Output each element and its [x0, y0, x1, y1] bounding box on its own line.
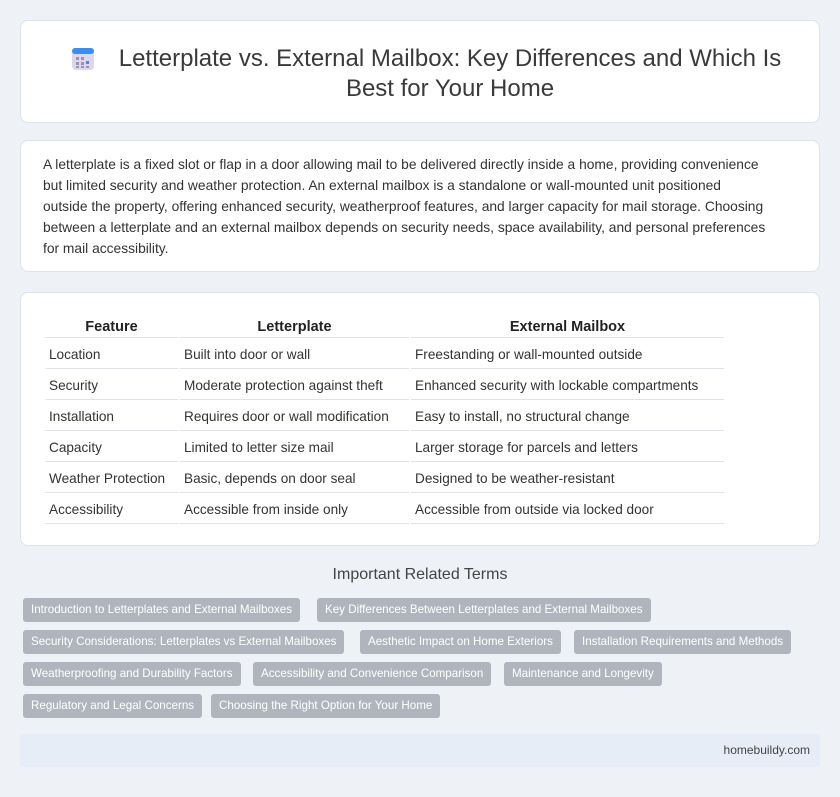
related term tags: Choosing the Right Option for Your Home [219, 699, 432, 712]
related term tags: Installation Requirements and Methods [582, 635, 783, 648]
comparison table card: Accessible from outside via locked door [415, 502, 654, 516]
comparison table card: Accessible from inside only [184, 502, 348, 516]
comparison table card: Easy to install, no structural change [415, 408, 630, 424]
comparison table card: Freestanding or wall-mounted outside [415, 346, 642, 362]
comparison table card: Enhanced security with lockable compartments [415, 378, 698, 392]
intro text card: but limited security and weather protection. An external mailbox is a standalone or wall-mounted unit positioned [43, 178, 721, 193]
related term tags: Key Differences Between Letterplates and External Mailboxes [325, 603, 643, 616]
comparison table card: External Mailbox [510, 319, 625, 335]
related term tags: Accessibility and Convenience Comparison [261, 667, 483, 680]
comparison table card: Installation [49, 408, 114, 424]
intro text card: for mail accessibility. [43, 241, 168, 256]
related term tags: Introduction to Letterplates and External Mailboxes [31, 603, 292, 616]
related terms heading: Important Related Terms [333, 566, 507, 583]
comparison table card: Limited to letter size mail [184, 440, 334, 454]
related term tags: Regulatory and Legal Concerns [31, 699, 194, 712]
intro text card: between a letterplate and an external mailbox depends on security needs, space availability, and personal preferences [43, 220, 765, 235]
icon: calendar [72, 48, 94, 70]
comparison table card: Accessibility [49, 502, 123, 516]
comparison table card: Requires door or wall modification [184, 408, 389, 424]
intro text card: A letterplate is a fixed slot or flap in a door allowing mail to be delivered directly inside a home, providing convenience [43, 157, 759, 172]
related term tags: Security Considerations: Letterplates vs External Mailboxes [31, 635, 336, 648]
comparison table card: Basic, depends on door seal [184, 470, 356, 486]
footer: homebuildy.com [724, 743, 810, 757]
comparison table card: Security [49, 378, 98, 392]
related term tags: Aesthetic Impact on Home Exteriors [368, 635, 553, 648]
comparison table card: Larger storage for parcels and letters [415, 440, 638, 454]
related term tags: Weatherproofing and Durability Factors [31, 667, 232, 680]
footer [20, 734, 820, 767]
title: Letterplate vs. External Mailbox: Key Differences and Which Is Best for Your Home [119, 45, 781, 102]
intro text card [20, 140, 820, 272]
comparison table card: Letterplate [257, 319, 332, 335]
comparison table card: Weather Protection [49, 470, 165, 486]
comparison table card: Capacity [49, 440, 102, 454]
comparison table card: Moderate protection against theft [184, 378, 383, 392]
comparison table card: Built into door or wall [184, 346, 310, 362]
comparison table card: Feature [85, 319, 138, 335]
related term tags: Maintenance and Longevity [512, 667, 654, 680]
comparison table card: Designed to be weather-resistant [415, 470, 614, 486]
comparison table card [20, 292, 820, 546]
intro text card: outside the property, offering enhanced security, weatherproof features, and larger capacity for mail storage. Choosing [43, 199, 763, 214]
header card [20, 20, 820, 123]
comparison table card: Location [49, 346, 100, 362]
